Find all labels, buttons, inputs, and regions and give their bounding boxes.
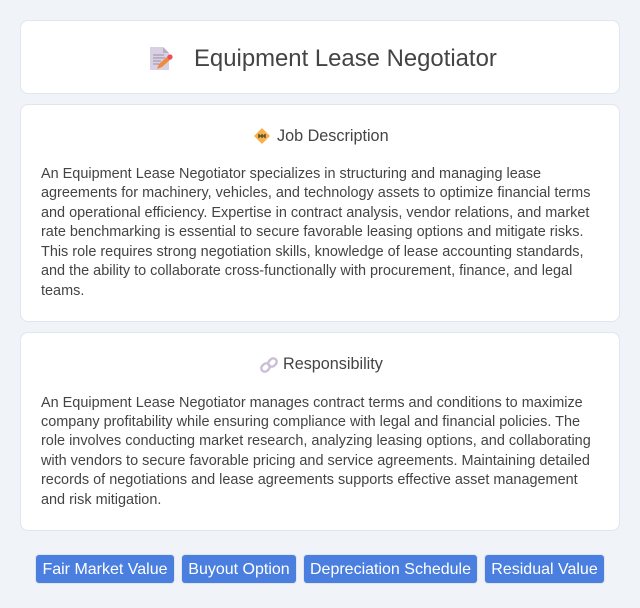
text: job description [41,166,590,299]
title: Equipment Lease Negotiator [194,45,497,72]
panel: responsibility [20,332,620,531]
tag: fair market value [36,555,174,583]
text: job description: An Equipment Lease Negotiator specializes in structuring and managing lease [41,166,541,182]
tag: fair market value: Fair Market Value [42,561,168,578]
text: job description: rate benchmarking is essential to secure favorable leasing options and mitigate risks. [41,224,584,240]
icon: chain link [260,357,278,373]
text: responsibility: company profitability while ensuring compliance with legal and financial policies. The [41,414,580,430]
text: responsibility: and risk mitigation. [41,492,161,508]
tag: residual value: Residual Value [491,561,598,578]
text: responsibility: with vendors to secure favorable pricing and service agreements. Maintaining detailed [41,453,590,469]
heading: job description: Job Description [277,127,389,145]
panel: job description [20,104,620,322]
panel: title card [20,20,620,94]
tag: buyout option: Buyout Option [188,561,290,578]
text: responsibility: records of negotiations and lease agreements supports effective asset management [41,472,578,488]
heading: responsibility: Responsibility [283,355,383,373]
text: job description: and the ability to collaborate cross-functionally with procurement, finance, and legal [41,263,572,279]
text: job description: This role requires strong negotiation skills, knowledge of lease accounting standards, [41,244,584,260]
text: job description: teams. [41,283,84,299]
tag: depreciation schedule [304,555,477,583]
text: responsibility [41,394,591,508]
text: responsibility: An Equipment Lease Negotiator manages contract terms and conditions to maximize [41,394,583,410]
tag: residual value [485,555,604,583]
tag: depreciation schedule: Depreciation Schedule [310,561,471,578]
icon: document with pencil [150,47,173,70]
text: responsibility: role involves conducting market research, analyzing leasing options, and collaborating [41,433,591,449]
icon: warning diamond [254,128,270,144]
text: job description: agreements for machinery, vehicles, and technology assets to optimize financial terms [41,185,590,201]
text: job description: and operational efficiency. Expertise in contract analysis, vendor relations, and market [41,205,589,221]
tag: buyout option [182,555,296,583]
